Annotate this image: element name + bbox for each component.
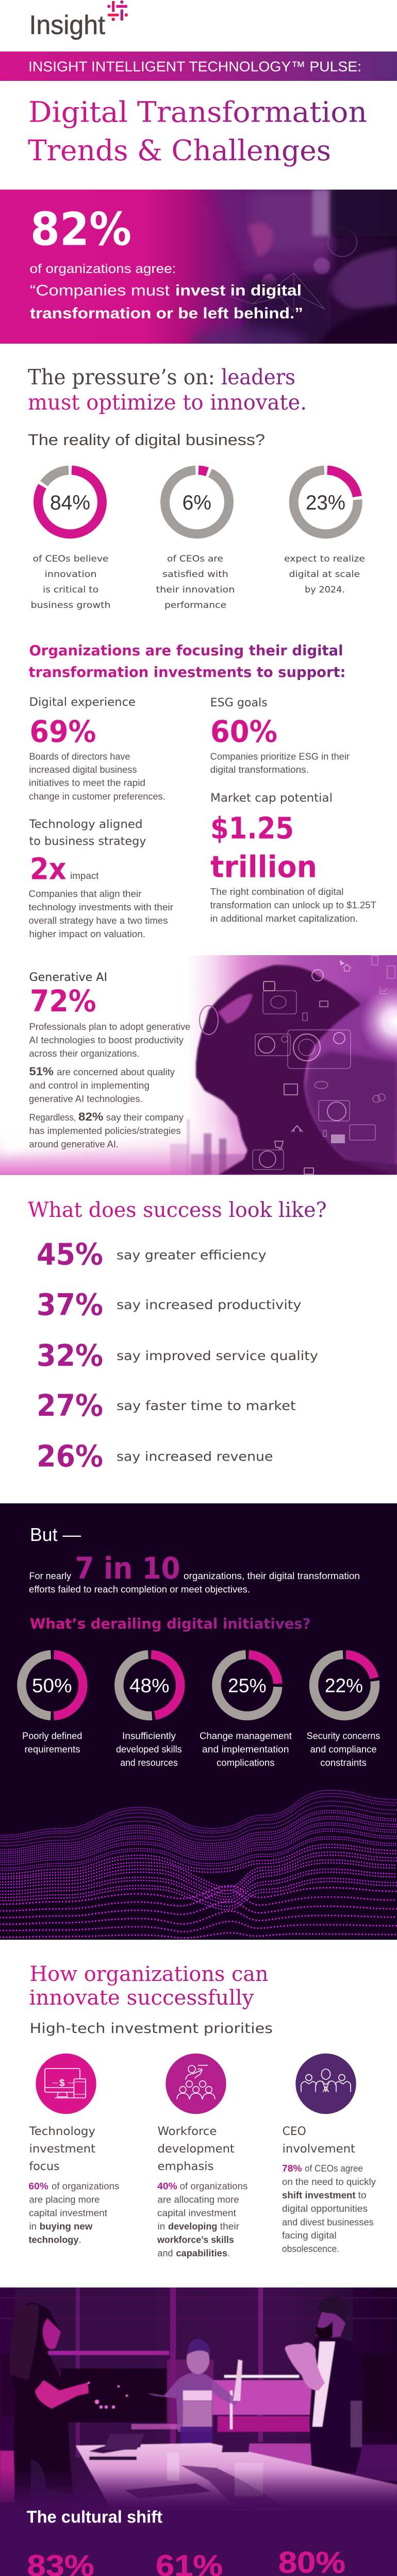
donut chart: 22 percent: 22% [325,1675,363,1697]
caption: security concerns [307,1731,380,1768]
column: technology investment focus: focus [29,2160,60,2173]
stat: market cap potential: in additional market capitalization. [210,913,358,924]
stat list: success measures: say increased productivity [117,1297,302,1312]
subheading: the reality of digital business: The reality of digital business? [28,431,265,449]
stat list: success measures [37,1237,318,1473]
stat: market cap potential: Market cap potential [210,792,333,805]
banner: Insight Intelligent Technology Pulse: INSIGHT INTELLIGENT TECHNOLOGY™ PULSE: [28,58,361,74]
logo: Insight header [29,1,128,40]
caption: insufficiently developed skills: and resources [120,1758,178,1768]
stat: technology aligned to strategy [28,818,173,939]
text: But 7 in 10: But — [30,1524,81,1545]
column: technology investment focus: Technology [28,2125,95,2138]
stat: digital experience 69 percent: Digital experience [29,696,136,709]
caption: CEOs satisfied: their innovation [156,585,235,595]
panel: hero 82 percent: transformation or be left behind.” [30,305,303,322]
stat: ESG goals 60 percent: digital transformations. [210,765,309,775]
column: technology investment focus: are placing more [29,2195,100,2205]
column: technology investment focus: investment [29,2143,95,2156]
stat: digital experience 69 percent: change in customer preferences. [29,791,166,802]
heading: how organizations can innovate: innovate successfully [29,1986,254,2010]
title: Digital Transformation [28,96,367,129]
panel: generative AI: Professionals plan to adopt generative [29,1022,190,1032]
title: Trends & Challenges [28,134,331,167]
column: workforce development emphasis: . [227,2248,230,2259]
column: workforce development emphasis: capabilities [176,2248,227,2259]
stat list: success measures: say increased revenue [117,1449,273,1464]
column: technology investment focus: 60% [29,2181,48,2192]
stat list: success measures: 32% [37,1338,103,1373]
stat list: success measures: 45% [37,1237,103,1272]
panel: generative AI: say their company [106,1112,184,1123]
stat: ESG goals 60 percent: 60% [210,714,277,749]
caption: CEOs believe innovation: innovation [44,569,97,580]
hologram avatar [147,2339,242,2453]
column: technology investment focus: buying new [40,2222,93,2232]
icon: presenter and audience [166,2054,226,2114]
digital overlay icons [253,956,395,1174]
caption: realize digital at scale [284,554,365,595]
column: workforce development emphasis: their [220,2222,239,2232]
panel: generative AI: 72% [30,984,96,1019]
stat: ESG goals 60 percent: ESG goals [210,697,268,709]
heading: what does success look like: What does success look like? [28,1198,327,1222]
heading: how organizations can innovate: How organizations can [30,1962,268,1986]
stat: digital experience 69 percent: initiatives to meet the rapid [29,778,145,788]
caption: change management [200,1731,292,1768]
panel: generative AI: 82% [78,1110,103,1123]
column: workforce development emphasis: emphasis [158,2160,213,2173]
stat: digital experience 69 percent: 69% [30,714,96,749]
stat list: success measures: say improved service quality [117,1348,318,1363]
text: But 7 in 10 [29,1524,360,1595]
donut chart: 50 percent [22,1655,83,1716]
panel: generative AI: AI technologies to boost productivity [29,1035,184,1045]
column: CEO involvement: shift investment [282,2190,356,2200]
icon: three executives [295,2054,356,2114]
woman silhouette [10,2303,89,2509]
illustration: dotted wave landscape [0,1790,397,1938]
stat: technology aligned to strategy: 2x [30,852,67,887]
stat list: success measures: 37% [37,1287,103,1323]
panel: generative AI: generative AI technologies. [29,1094,142,1104]
caption: security concerns: and compliance [310,1744,377,1755]
donut chart: 84 percent [38,470,102,534]
caption: insufficiently developed skills [116,1731,182,1768]
caption: realize digital at scale: by 2024. [305,585,345,595]
caption: poorly defined requirements [22,1731,82,1755]
caption: CEOs satisfied: performance [164,600,226,611]
column: CEO involvement: to [358,2190,367,2200]
caption: insufficiently developed skills: Insufficiently [122,1731,176,1741]
heading: the pressure's on: must optimize to innovate. [28,390,307,415]
caption: change management: Change management [200,1731,292,1741]
column: CEO involvement: obsolescence. [282,2244,339,2254]
heading: organizations are focusing [29,642,345,681]
heading: what's derailing digital initiatives: What’s derailing digital initiatives? [30,1615,311,1632]
panel: generative AI [0,955,397,1190]
column: technology investment focus: capital investment [29,2208,107,2218]
donut chart: 25 percent [217,1655,278,1716]
stat: technology aligned to strategy: Technology aligned [28,818,142,831]
panel: generative AI: Regardless, [29,1112,76,1123]
caption: CEOs satisfied: satisfied with [162,569,228,580]
stat: ESG goals 60 percent [210,697,350,775]
caption: CEOs satisfied: of CEOs are [167,554,223,564]
caption: realize digital at scale: expect to realize [284,554,365,564]
text: But 7 in 10: 7 in 10 [75,1551,180,1586]
heading: the pressure's on: The pressure’s on: leaders [28,365,295,389]
panel: generative AI: has implemented policies/strategies [29,1126,181,1136]
panel: generative AI: around generative AI. [29,1139,119,1149]
caption: security concerns: Security concerns [307,1731,380,1741]
column: technology investment focus: in [29,2222,37,2232]
column: CEO involvement: digital opportunities [282,2204,368,2214]
text: But 7 in 10: For nearly [29,1571,71,1581]
stat list: success measures: say greater efficiency [117,1247,267,1262]
donut chart: 48 percent [119,1655,180,1716]
stat: technology aligned to strategy: to business strategy [29,835,146,848]
panel: generative AI: 51% [29,1065,54,1078]
stat: digital experience 69 percent: Boards of directors have [29,751,130,761]
icon: monitor and tablet with dollar sign: $ [59,2078,65,2089]
panel: generative AI: and control in implementing [29,1080,150,1091]
column: workforce development emphasis [157,2054,247,2259]
panel: the cultural shift: The cultural shift [27,2507,162,2526]
stat: ESG goals 60 percent: Companies prioritize ESG in their [210,751,350,761]
panel: generative AI: are concerned about quality [57,1067,175,1077]
caption: poorly defined requirements: Poorly defined [22,1731,82,1741]
column: workforce development emphasis: and [158,2248,173,2259]
column: workforce development emphasis: are allocating more [158,2195,239,2205]
stat: market cap potential: transformation can unlock up to $1.25T [210,900,376,910]
stat: market cap potential: $1.25 [210,811,294,846]
panel: hero 82 percent: 82% [30,202,131,256]
donut chart: 22 percent [313,1655,375,1716]
column: CEO involvement [282,2054,376,2254]
column: workforce development emphasis: Workforce [158,2125,217,2138]
heading: the pressure's on [28,365,307,415]
donut chart: 6 percent: 6% [183,492,211,514]
column: CEO involvement: and divest businesses [282,2217,373,2227]
column: CEO involvement: 78% [282,2163,302,2174]
stat: market cap potential: trillion [210,849,317,884]
panel: generative AI: across their organizations. [29,1048,139,1059]
caption: CEOs believe innovation: is critical to [43,585,98,595]
column: workforce development emphasis: development [158,2143,235,2156]
banner: Insight Intelligent Technology Pulse [0,52,397,81]
icon: monitor and tablet with dollar sign [36,2054,96,2114]
hero photo: laptop and hands [191,190,397,353]
stat: digital experience 69 percent [29,696,166,802]
title [28,96,367,167]
panel: hero 82 percent: of organizations agree: [30,262,176,276]
column: technology investment focus: of organizations [52,2181,119,2192]
column: workforce development emphasis: 40% [157,2181,177,2192]
heading: how organizations can innovate [29,1962,268,2010]
column: workforce development emphasis: capital investment [157,2208,236,2218]
donut chart: 84 percent: 84% [50,492,90,514]
donut chart: 25 percent: 25% [228,1675,267,1697]
column: technology investment focus: . [78,2235,81,2245]
stat: technology aligned to strategy: overall strategy have a two times [29,916,168,926]
column: technology investment focus: technology [29,2235,78,2245]
caption: CEOs believe innovation [31,554,110,611]
panel: hero 82 percent: “Companies must [30,282,170,299]
stat: market cap potential [210,792,376,924]
panel: hero 82 percent [0,190,397,353]
subheading: high-tech investment priorities: High-tech investment priorities [30,2021,273,2037]
caption: change management: and implementation [202,1744,289,1755]
caption: change management: complications [217,1758,274,1768]
column: workforce development emphasis: workforce’s skills [157,2235,234,2245]
photo: woman with digital overlay [0,955,397,1190]
panel: dark challenges [0,1503,397,1940]
stat: market cap potential: The right combination of digital [210,887,343,897]
donut chart: 50 percent: 50% [32,1675,72,1697]
column: workforce development emphasis: developing [168,2222,217,2232]
column: CEO involvement: of CEOs agree [305,2163,363,2174]
caption: CEOs believe innovation: business growth [31,600,110,611]
donut chart: 23 percent [294,470,358,534]
column: CEO involvement: on the need to quickly [282,2177,376,2187]
heading: organizations are focusing: Organizations are focusing their digital [29,642,343,659]
column: workforce development emphasis: of organizations [180,2181,247,2192]
stat: technology aligned to strategy: technology investments with their [29,902,173,912]
column: CEO involvement: CEO [283,2125,306,2138]
heading: organizations are focusing: transformation investments to support: [29,664,345,681]
stat: digital experience 69 percent: increased digital business [29,765,137,775]
panel: hero 82 percent: invest in digital [175,282,302,299]
caption: CEOs satisfied [156,554,235,611]
caption: insufficiently developed skills: developed skills [116,1744,182,1755]
donut chart: 6 percent [165,470,229,534]
conference table [76,2443,397,2509]
text: But 7 in 10: efforts failed to reach completion or meet objectives. [29,1584,250,1595]
donut chart: 48 percent: 48% [129,1675,170,1697]
stat list: success measures: 27% [37,1388,103,1423]
column: CEO involvement: facing digital [282,2230,337,2241]
column: CEO involvement: involvement [283,2143,355,2156]
donut chart: 23 percent: 23% [306,492,345,514]
text: But 7 in 10: organizations, their digital transformation [184,1571,360,1581]
stat: technology aligned to strategy: Companies that align their [29,889,141,899]
stat list: success measures: 26% [37,1438,103,1473]
photo: meeting room with hologram [0,2287,397,2509]
panel: generative AI: Generative AI [29,971,107,984]
stat: technology aligned to strategy: higher impact on valuation. [29,929,145,939]
caption: realize digital at scale: digital at scale [289,569,360,580]
man figure [285,2297,364,2473]
caption: poorly defined requirements: requirements [25,1744,80,1755]
column: workforce development emphasis: in [158,2222,165,2232]
logo: Insight header: Insight [29,10,106,40]
stat: technology aligned to strategy: impact [70,871,99,881]
caption: CEOs believe innovation: of CEOs believe [33,554,108,564]
column: technology investment focus [28,2054,119,2245]
caption: security concerns: constraints [320,1758,367,1768]
stat list: success measures: say faster time to market [117,1398,296,1413]
panel: the cultural shift [0,2287,397,2576]
